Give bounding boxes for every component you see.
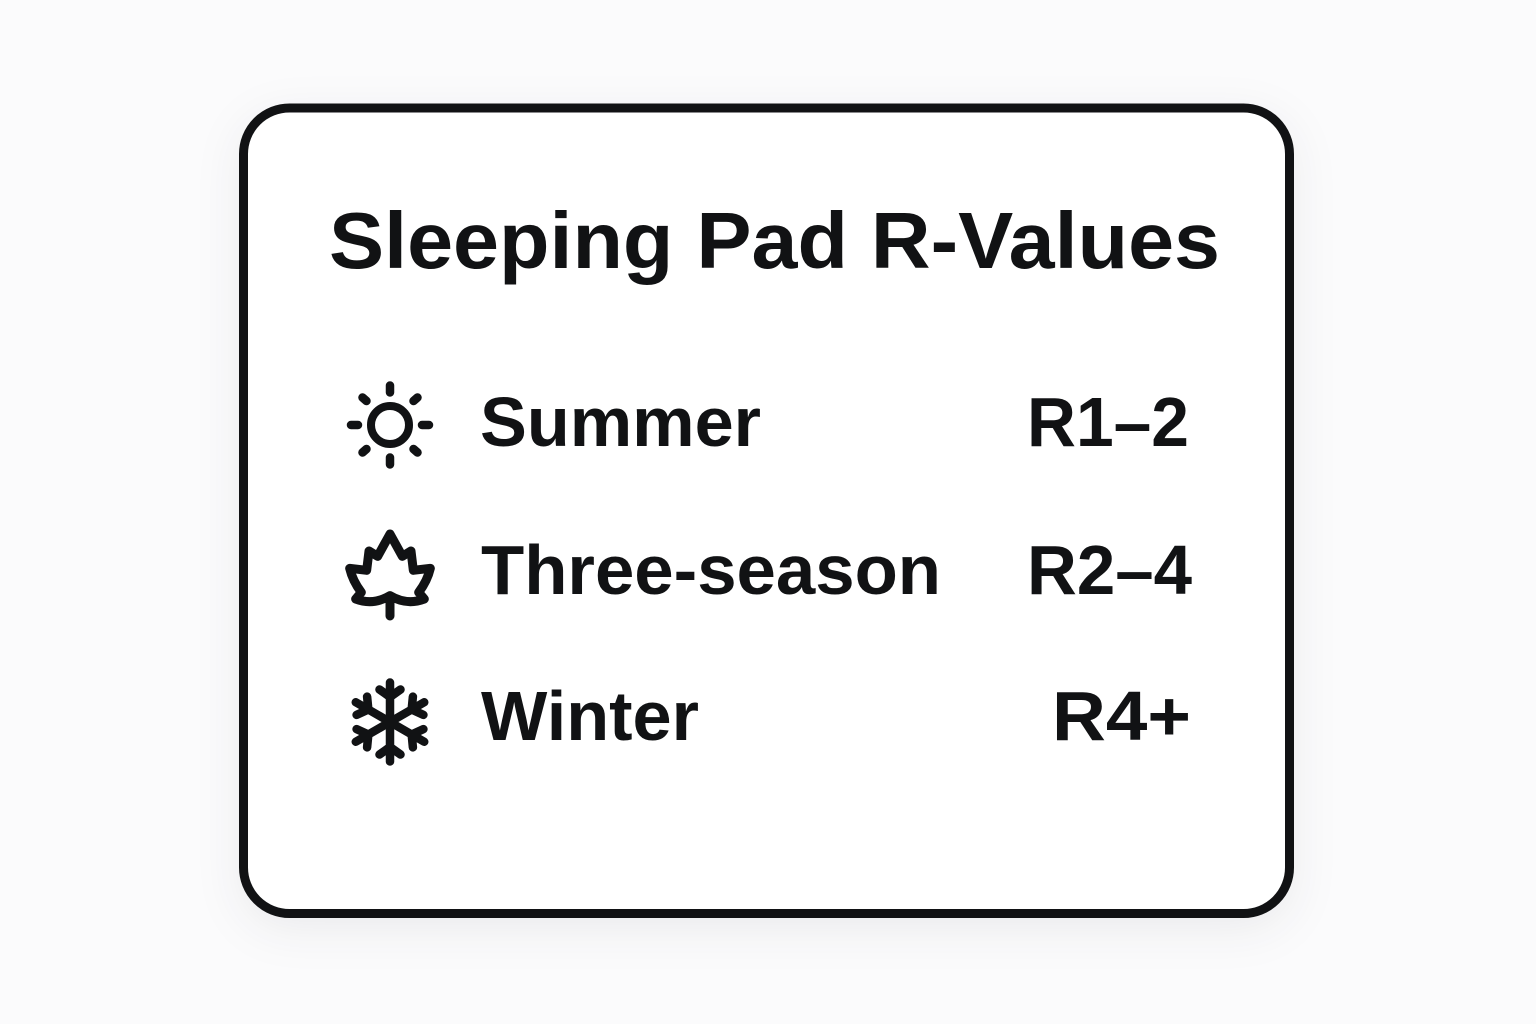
row: winter	[351, 677, 1191, 762]
panel: sleeping pad card	[244, 108, 1290, 914]
row: summer	[351, 383, 1189, 464]
row: three-season	[350, 531, 1192, 616]
value: winter R-value: R4+	[1052, 677, 1191, 755]
label: three-season: Three-season	[481, 531, 941, 609]
icon: maple leaf	[350, 534, 430, 616]
title: Sleeping Pad R-Values	[329, 196, 1220, 285]
value: three-season R-value: R2–4	[1027, 531, 1192, 609]
icon: snowflake	[351, 682, 429, 762]
label: winter: Winter	[481, 677, 699, 755]
value: summer R-value: R1–2	[1027, 383, 1189, 461]
label: summer: Summer	[480, 383, 761, 461]
icon: sun	[351, 386, 429, 464]
